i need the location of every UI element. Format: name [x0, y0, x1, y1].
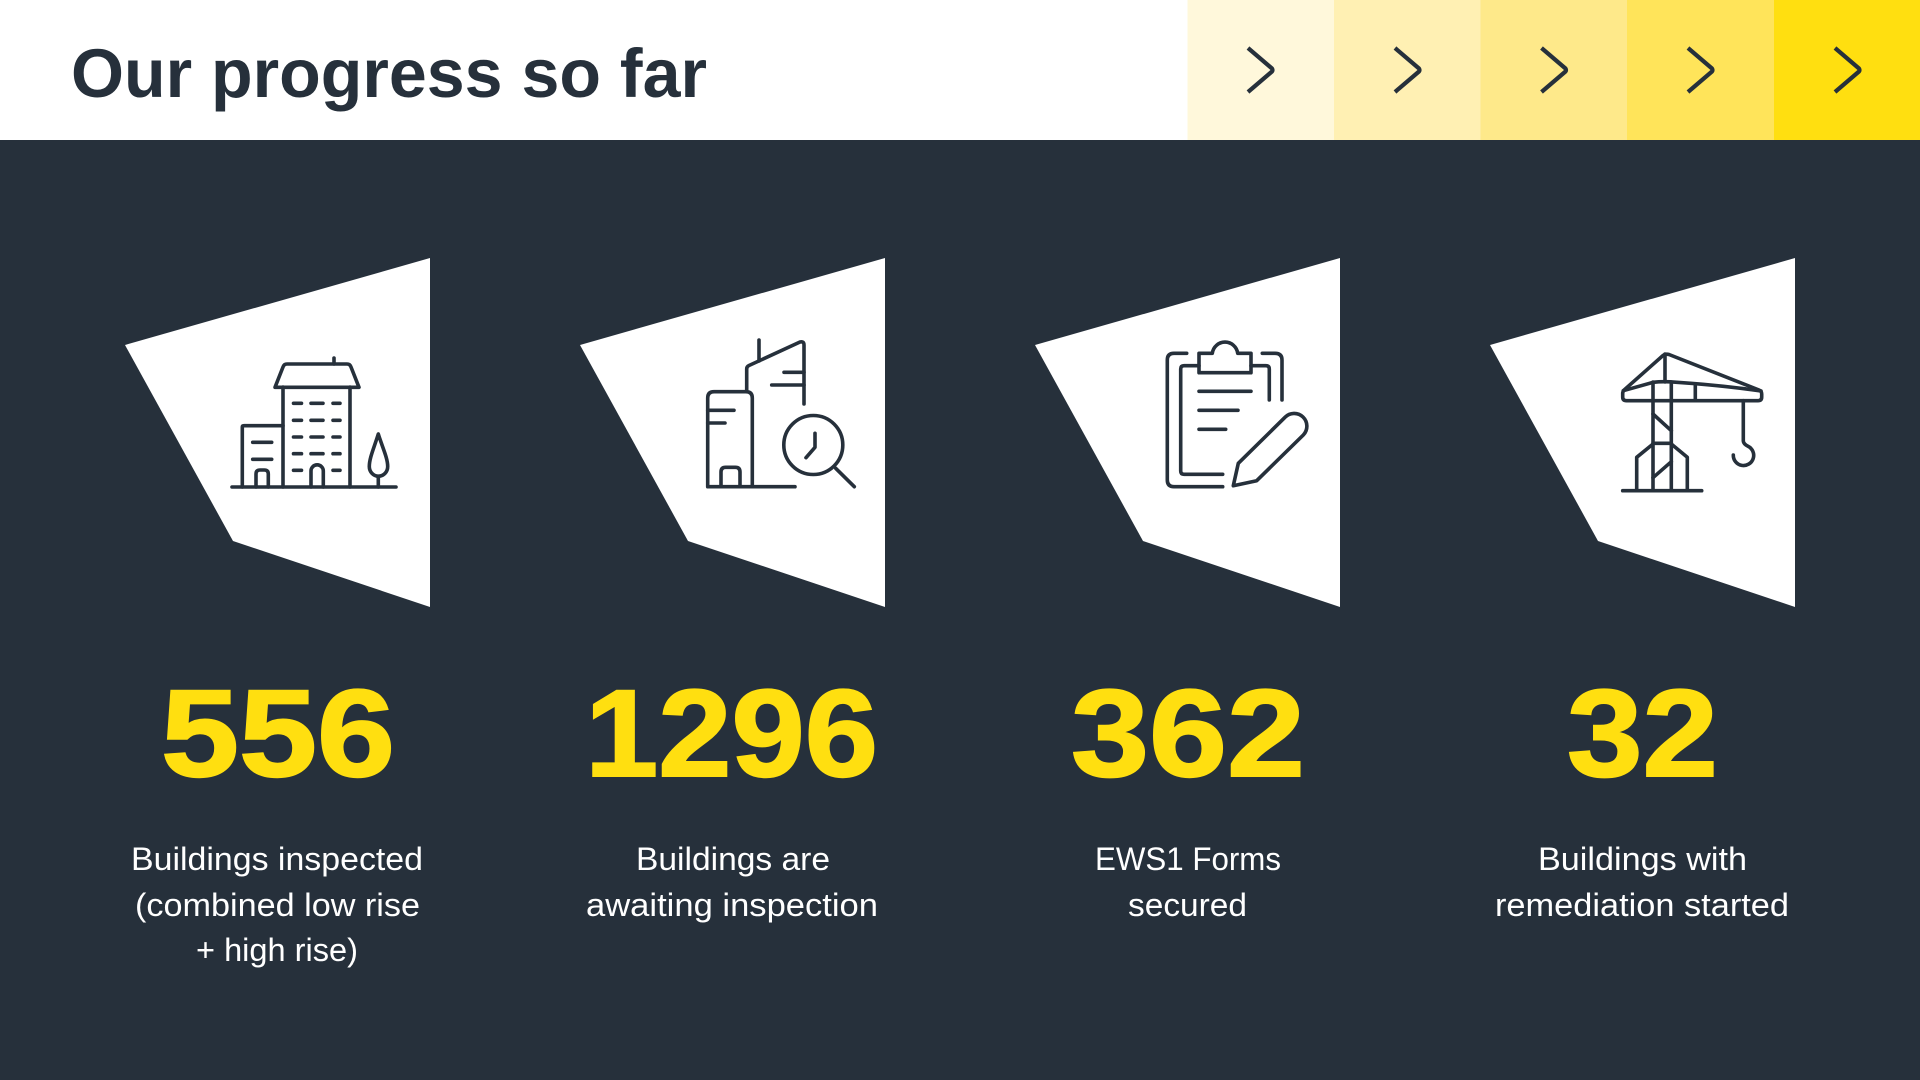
step 2	[1334, 0, 1480, 140]
label: buildings inspected: + high rise)	[196, 932, 358, 968]
label: EWS1 forms: secured	[1128, 887, 1247, 923]
step 4	[1627, 0, 1774, 140]
step 5	[1774, 0, 1920, 140]
panel: remediation started	[1490, 258, 1795, 607]
label: buildings inspected	[131, 841, 423, 968]
white shape	[1035, 258, 1340, 607]
label: EWS1 forms: EWS1 Forms	[1095, 841, 1281, 877]
label: remediation started: remediation started	[1495, 887, 1789, 923]
icon: city buildings and tree	[232, 358, 396, 487]
label: awaiting inspection	[586, 841, 878, 923]
panel: EWS1 forms	[1035, 258, 1340, 607]
step 3	[1480, 0, 1627, 140]
label: awaiting inspection: Buildings are	[636, 841, 830, 877]
progress chevron strip	[1188, 0, 1920, 140]
white shape	[125, 258, 430, 607]
label: awaiting inspection: awaiting inspection	[586, 887, 878, 923]
icon: buildings and magnifier clock	[708, 340, 854, 487]
label: EWS1 forms	[1095, 841, 1281, 923]
label: remediation started	[1495, 841, 1789, 923]
icon: clipboard and pencil	[1167, 342, 1307, 487]
stat: 362: 362	[1071, 665, 1305, 803]
stat: 556: 556	[161, 665, 395, 803]
label: remediation started: Buildings with	[1538, 841, 1747, 877]
white shape	[580, 258, 885, 607]
white shape	[1490, 258, 1795, 607]
title: Our progress so far	[71, 35, 707, 112]
panel: buildings inspected	[125, 258, 430, 607]
label: buildings inspected: (combined low rise	[135, 887, 420, 923]
stat: 32: 32	[1567, 665, 1718, 803]
step 1	[1188, 0, 1334, 140]
panel: awaiting inspection	[580, 258, 885, 607]
icon: tower crane	[1623, 354, 1762, 491]
label: buildings inspected: Buildings inspected	[131, 841, 423, 877]
stat: 1296: 1296	[585, 665, 878, 803]
